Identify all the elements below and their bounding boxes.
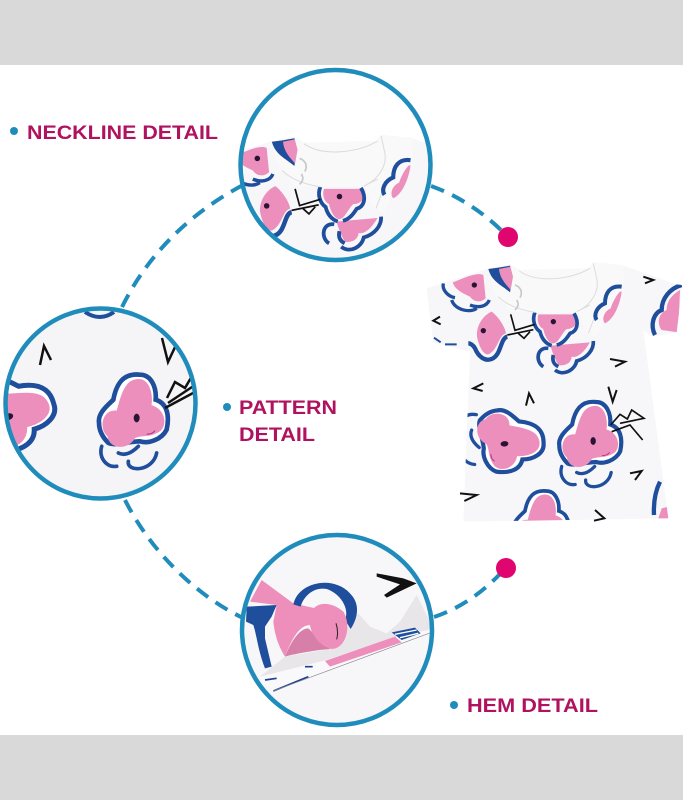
dashed connector: pattern to hem [125, 500, 243, 618]
shirt body [427, 262, 682, 522]
hem blue flower arc [293, 583, 357, 629]
hem pink fold [250, 580, 314, 656]
left flower [8, 380, 58, 451]
bullet: pattern [223, 403, 231, 411]
neckline detail circle [238, 68, 433, 262]
top petal [85, 312, 114, 317]
black chevrons [433, 277, 653, 521]
label: pattern detail [239, 398, 337, 446]
shoulder flower piece [488, 266, 513, 292]
hem blue panel [246, 605, 277, 668]
marker dot: hem [496, 558, 516, 578]
hem detail circle [240, 532, 434, 728]
dashed connector: neckline to shirt marker [431, 186, 502, 231]
hem circle ring [242, 535, 432, 725]
bottom grey band [0, 735, 683, 800]
t-shirt photo [427, 262, 682, 566]
flower: lower shoulder [468, 312, 507, 360]
hem inner shadow [260, 595, 433, 677]
marker dot: neckline [498, 227, 518, 247]
hem blue stripe [265, 667, 313, 691]
hem pink stripe [325, 637, 402, 667]
label: neckline detail: NECKLINE DETAIL [27, 123, 218, 144]
flower: collar right [595, 286, 622, 323]
flower: centre [534, 312, 577, 346]
collar ruffle [488, 263, 624, 337]
label: hem detail: HEM DETAIL [467, 696, 598, 717]
hem edge line [273, 632, 432, 691]
neckline circle ring [240, 70, 430, 260]
flower: lower centre [538, 341, 593, 373]
pattern zoomed view [8, 311, 193, 496]
hem zoomed view [246, 573, 430, 692]
black sprig neckline [507, 314, 535, 338]
bullet: hem [450, 701, 458, 709]
faint grey show-through flower [515, 285, 521, 310]
flower: lower right [654, 482, 670, 518]
label: pattern detail: PATTERN [239, 398, 337, 419]
dashed connector: hem to shirt marker [434, 574, 500, 617]
top grey band [0, 0, 683, 65]
large flower [99, 375, 168, 469]
chevrons and sprig [40, 338, 195, 408]
left sleeve mark [434, 338, 457, 344]
hem rolled pink edge [309, 604, 347, 649]
pattern circle ring [6, 308, 196, 498]
label: pattern detail: DETAIL [239, 425, 315, 446]
hem black chevron [377, 573, 417, 598]
shirt print [443, 274, 682, 566]
bullet: neckline [10, 127, 18, 135]
flower: upper left [443, 274, 489, 311]
dashed connector: pattern to neckline [122, 184, 245, 307]
black sprig lower [611, 410, 644, 440]
hem lower edge [329, 630, 430, 660]
flower: right sleeve [653, 285, 682, 335]
hem fold shadow [285, 628, 330, 657]
hem roll mark [336, 623, 338, 639]
pattern detail circle [0, 305, 200, 505]
neck band [498, 263, 597, 333]
neckline zoomed view [242, 136, 413, 252]
